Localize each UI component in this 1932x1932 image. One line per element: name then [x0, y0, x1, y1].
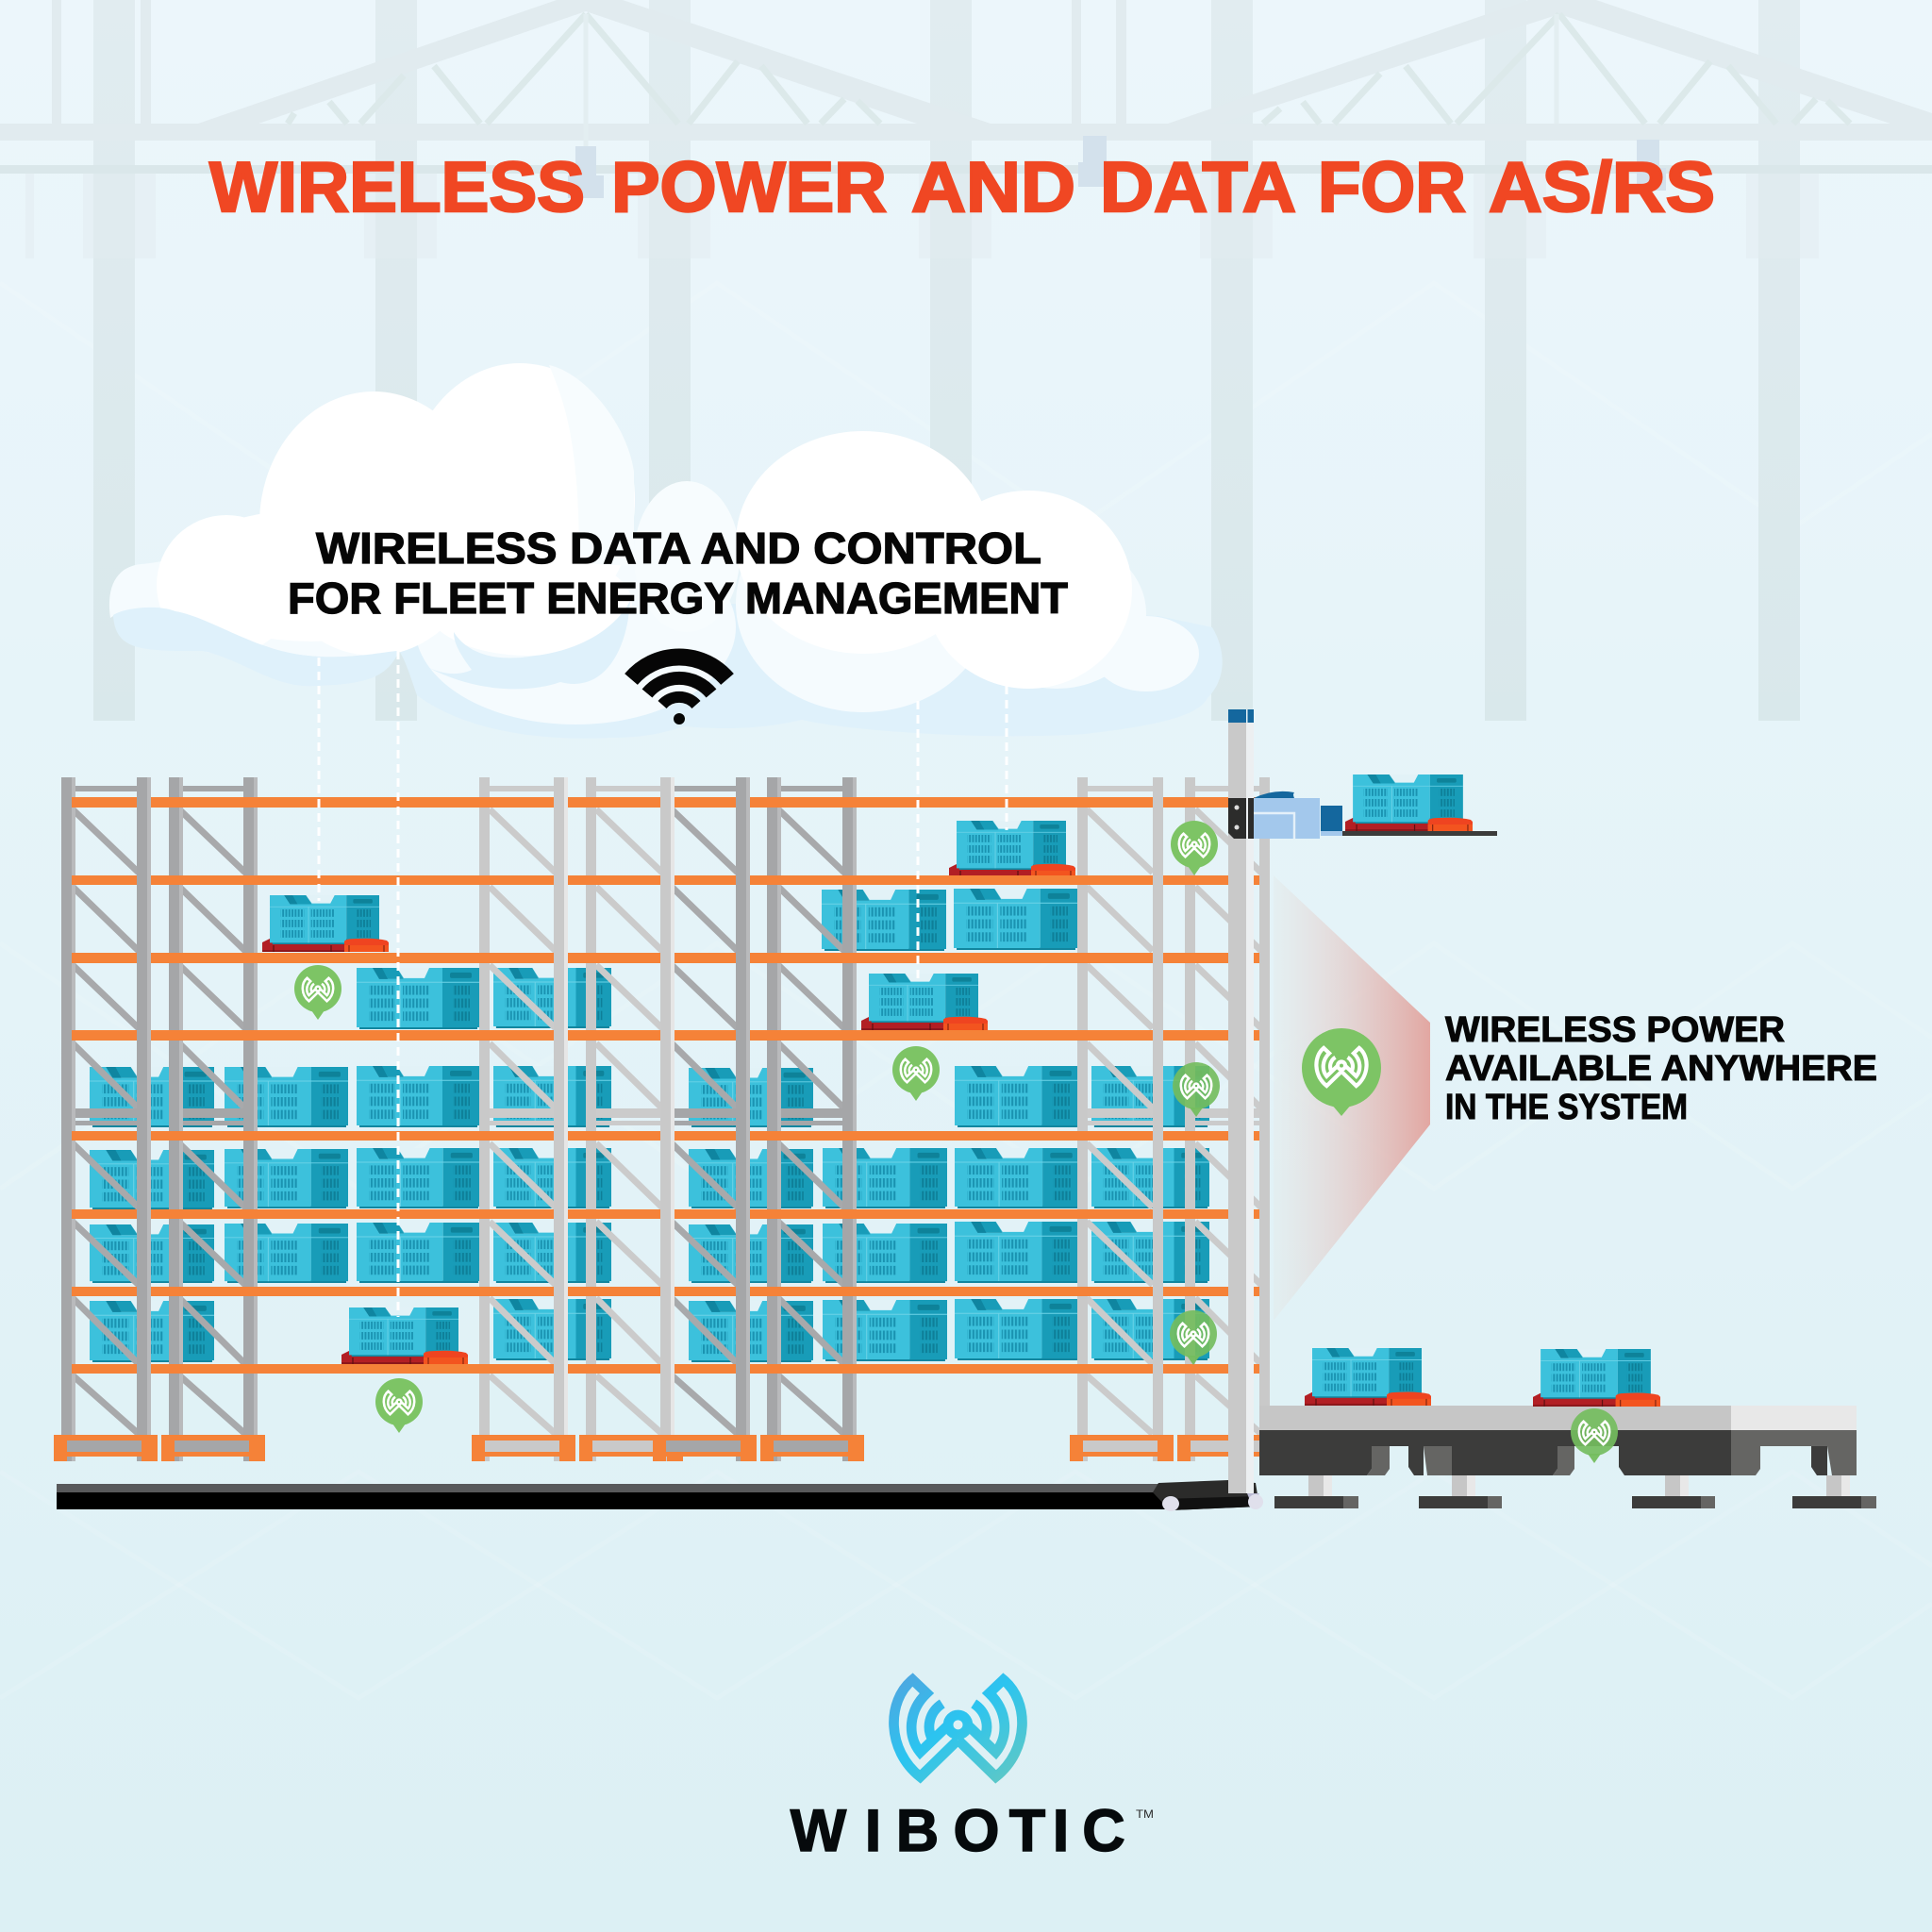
cloud — [109, 363, 1223, 739]
background lattice — [0, 283, 1932, 1698]
cloud heading: WIRELESS DATA AND CONTROL — [316, 524, 1041, 573]
warehouse roof truss and columns — [0, 0, 1932, 721]
rack structure — [54, 777, 1281, 1461]
dashed wireless data links — [319, 651, 1007, 1317]
stacker crane cart — [1153, 1480, 1263, 1511]
title: DATA — [1100, 147, 1296, 226]
title: FOR — [1318, 147, 1466, 226]
crane carriage with shuttle on shelf — [1228, 774, 1497, 839]
title: WIRELESS — [209, 147, 585, 226]
stacker crane mast — [1228, 709, 1254, 1493]
cloud heading: FOR FLEET ENERGY MANAGEMENT — [288, 574, 1068, 623]
WiBotic logo: TM — [1136, 1807, 1154, 1821]
wireless power pins — [294, 821, 1618, 1463]
title: POWER — [611, 147, 887, 226]
wireless power label: IN THE SYSTEM — [1445, 1088, 1688, 1127]
WiBotic logo — [791, 1680, 1154, 1864]
title: AND — [911, 147, 1075, 226]
stored crates — [90, 889, 1209, 1362]
title — [209, 147, 1715, 226]
floor rail — [57, 1484, 1165, 1509]
icon: wifi — [631, 657, 727, 724]
wireless power label: AVAILABLE ANYWHERE — [1445, 1049, 1877, 1089]
large wireless power pin — [1302, 1028, 1381, 1116]
wireless power label — [1445, 1010, 1877, 1127]
ceiling lamps — [568, 136, 1666, 198]
WiBotic logo: WIBOTIC — [791, 1798, 1125, 1864]
wireless power label: WIRELESS POWER — [1445, 1010, 1785, 1050]
shuttle robots carrying crates on the rack — [262, 821, 1075, 1364]
title: AS/RS — [1489, 147, 1715, 226]
cloud heading — [288, 524, 1068, 623]
shuttle robots on conveyor — [1305, 1348, 1660, 1407]
conveyor — [1259, 1406, 1876, 1508]
wireless power cone — [1274, 875, 1430, 1321]
